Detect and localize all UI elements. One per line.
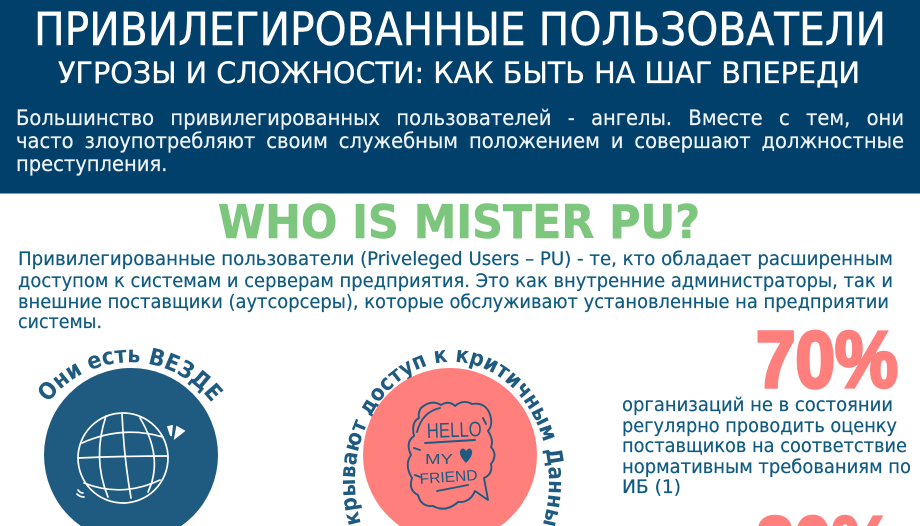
statistic description: организаций не в состоянии: [622, 394, 893, 416]
statistic description: ИБ (1): [622, 476, 681, 498]
bubble text: [419, 418, 482, 488]
definition text: [18, 248, 893, 333]
section heading: WHO IS MISTER PU?: [218, 195, 700, 249]
definition text: внешние поставщики (аутсорсеры), которые обслуживают установленные на предприятии: [18, 291, 889, 313]
statistic description: нормативным требованиям по: [622, 456, 911, 478]
bubble text: MY: [425, 451, 453, 468]
intro paragraph: преступления.: [16, 152, 167, 177]
definition text: Привилегированные пользователи (Priveleged Users – PU) - те, кто обладает расширенным: [18, 248, 893, 270]
panel: they open access: [342, 350, 564, 526]
definition text: системы.: [18, 311, 102, 333]
statistic: 70%: 70%: [756, 315, 898, 404]
intro paragraph: [16, 106, 904, 177]
icon: heart: [460, 448, 472, 463]
blue circle: [44, 368, 218, 526]
intro paragraph: часто злоупотребляют своим служебным положением и совершают должностные: [16, 129, 904, 154]
icon: globe: [77, 413, 184, 503]
statistic description: [622, 394, 911, 498]
icon: speech bubble: [408, 402, 494, 509]
intro paragraph: Большинство привилегированных пользователей - ангелы. Вместе с тем, они: [16, 106, 904, 131]
bubble text: FRIEND: [419, 467, 478, 488]
bubble text: HELLO: [426, 418, 482, 443]
header banner: [0, 0, 920, 194]
coral circle: [363, 368, 537, 526]
definition text: доступом к системам и серверам предприятия. Это как внутренние администраторы, так и: [18, 270, 893, 292]
title: ПРИВИЛЕГИРОВАННЫЕ ПОЛЬЗОВАТЕЛИ: [34, 3, 886, 56]
statistic description: регулярно проводить оценку: [622, 415, 897, 437]
statistic description: поставщиков на соответствие: [622, 435, 907, 457]
subtitle: УГРОЗЫ И СЛОЖНОСТИ: КАК БЫТЬ НА ШАГ ВПЕРЕДИ: [58, 56, 860, 90]
panel: they are everywhere: [38, 348, 224, 526]
curved label: everywhere: Они есть ВЕЗДЕ: [38, 348, 224, 402]
